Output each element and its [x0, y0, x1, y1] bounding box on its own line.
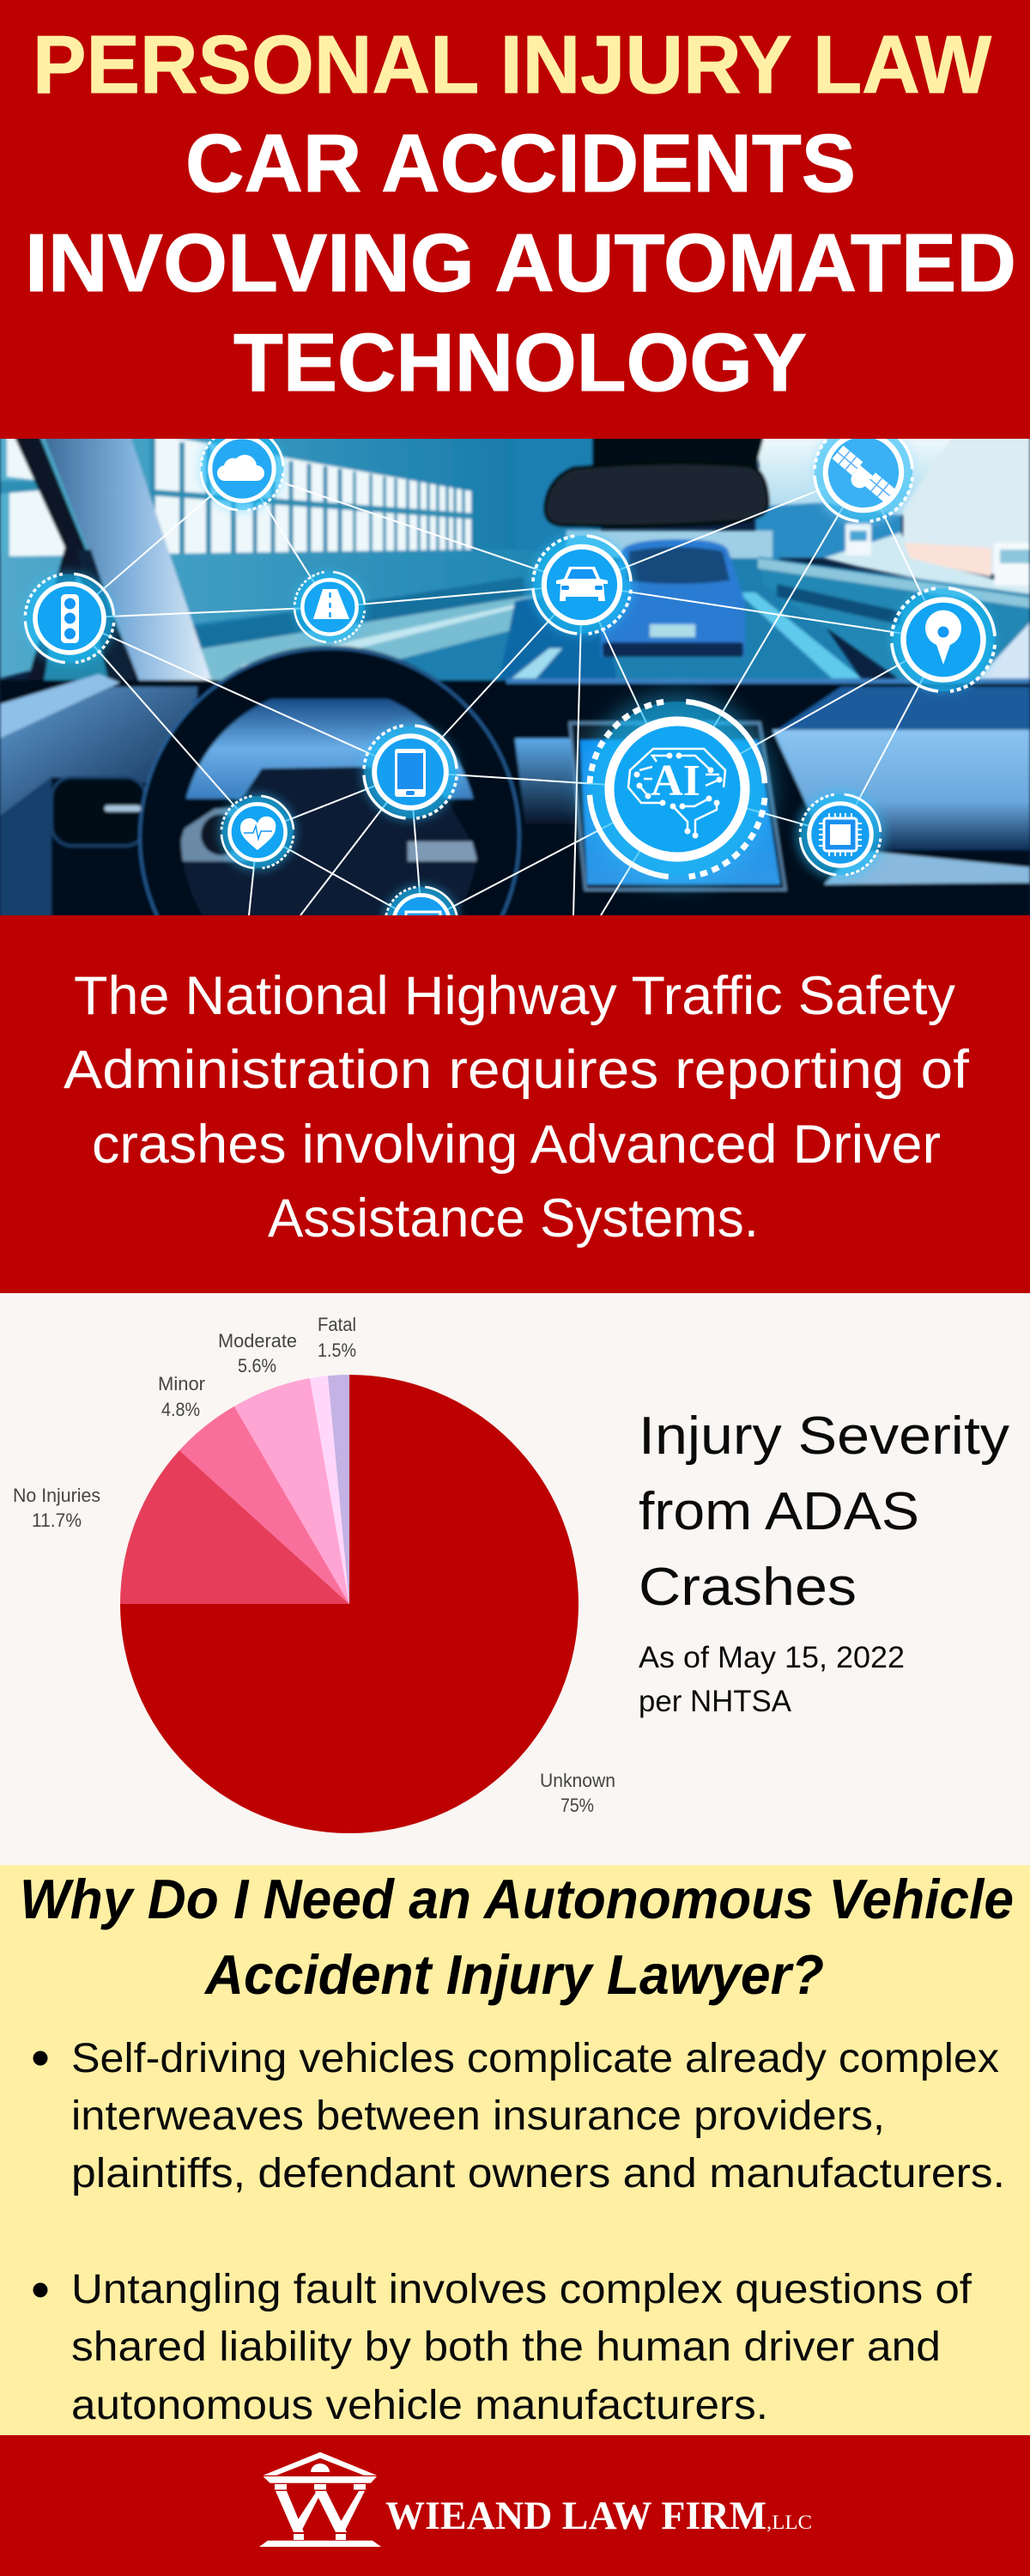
footer: law firm logo: [0, 2435, 1030, 2576]
icon: courthouse W logo: [259, 2452, 381, 2547]
sky and far buildings: [515, 434, 957, 558]
pie labels: 1.5%: [318, 1340, 356, 1361]
pie labels: Fatal: [318, 1314, 356, 1335]
panel heading: Accident Injury Lawyer?: [203, 1943, 824, 2006]
icon: AI brain node: [583, 695, 772, 884]
rearview mirror: [545, 434, 768, 526]
pie labels: Moderate: [218, 1330, 297, 1352]
icon: chip node: [796, 790, 885, 879]
photo: car interior with connected technology icons: [0, 439, 1030, 915]
bullet: untangling fault: Untangling fault involves complex questions of: [71, 2267, 972, 2312]
icon: cloud node: [201, 428, 283, 510]
pie labels: 4.8%: [161, 1399, 200, 1420]
icon: bottom screen node: [378, 879, 465, 915]
icon: location pin node: [892, 588, 995, 691]
chart heading: Crashes: [639, 1558, 857, 1617]
chart heading: Injury Severity: [639, 1406, 1009, 1466]
statement line 2: Administration requires reporting of: [64, 1040, 970, 1100]
title line: Technology: TECHNOLOGY: [233, 317, 807, 409]
bullet: untangling fault: [33, 2267, 972, 2428]
dashboard: [0, 674, 1030, 920]
icon: heart node: [220, 794, 295, 870]
pie labels: 75%: [560, 1795, 594, 1816]
icon: phone node: [362, 724, 458, 820]
far road and guard rail: [758, 532, 1030, 687]
chart source note: [639, 1641, 905, 1718]
statement line 3: crashes involving Advanced Driver: [92, 1115, 941, 1175]
car ahead: [601, 539, 745, 657]
trucks: [845, 524, 1030, 586]
tunnel and noise barrier: [0, 439, 603, 559]
steering wheel: [136, 644, 524, 915]
statement line 1: The National Highway Traffic Safety: [74, 966, 956, 1026]
icon: AI brain node: AI: [651, 756, 700, 805]
chart source note: per NHTSA: [639, 1685, 792, 1718]
panel: injury severity chart: [0, 1293, 1030, 1865]
panel heading: Why Do I Need an Autonomous Vehicle: [20, 1868, 1014, 1930]
A-pillar: [13, 434, 214, 687]
bullet: untangling fault: autonomous vehicle manufacturers.: [71, 2383, 768, 2428]
pie chart: injury severity: [120, 1375, 579, 1833]
panel heading: [20, 1868, 1014, 2006]
firm suffix: ,LLC: [766, 2512, 812, 2533]
pie labels: [13, 1314, 615, 1816]
pie labels: No Injuries: [13, 1485, 100, 1506]
bullet: self-driving vehicles: Self-driving vehicles complicate already complex: [71, 2036, 999, 2081]
bullet: self-driving vehicles: interweaves between insurance providers,: [71, 2093, 885, 2139]
chart heading: [639, 1406, 1009, 1617]
pie labels: Minor: [158, 1373, 205, 1394]
chart source note: As of May 15, 2022: [639, 1641, 905, 1674]
right side barrier: [903, 434, 1030, 601]
icon: traffic light node: [23, 572, 116, 665]
centre touchscreen: [570, 723, 785, 890]
title block: [25, 19, 1016, 409]
windscreen corner: [977, 621, 1030, 682]
title line: Car Accidents: CAR ACCIDENTS: [185, 118, 856, 210]
photo backdrop scene: [0, 439, 1030, 915]
title line: Involving Automated: INVOLVING AUTOMATED: [25, 217, 1016, 309]
chart heading: from ADAS: [639, 1482, 919, 1541]
pie labels: Unknown: [540, 1770, 615, 1791]
bullet: self-driving vehicles: [33, 2036, 1005, 2196]
bullet: untangling fault: shared liability by both the human driver and: [71, 2324, 941, 2370]
icon: road node: [294, 571, 366, 643]
firm name: WIEAND LAW FIRM: [385, 2494, 766, 2538]
road: [137, 550, 867, 687]
pie labels: 11.7%: [32, 1510, 82, 1531]
panel: why you need a lawyer: [0, 1865, 1030, 2435]
statement line 4: Assistance Systems.: [268, 1188, 759, 1249]
roadside wall: [0, 550, 542, 681]
title line: Personal Injury Law: PERSONAL INJURY LAW: [33, 19, 991, 111]
network connection lines: [70, 469, 943, 923]
icon: car node: [530, 533, 633, 636]
bullet: self-driving vehicles: plaintiffs, defendant owners and manufacturers.: [71, 2151, 1005, 2196]
panel: ADAS reporting statement: [0, 915, 1030, 1293]
pie labels: 5.6%: [238, 1355, 276, 1376]
icon: satellite node: [810, 439, 917, 527]
